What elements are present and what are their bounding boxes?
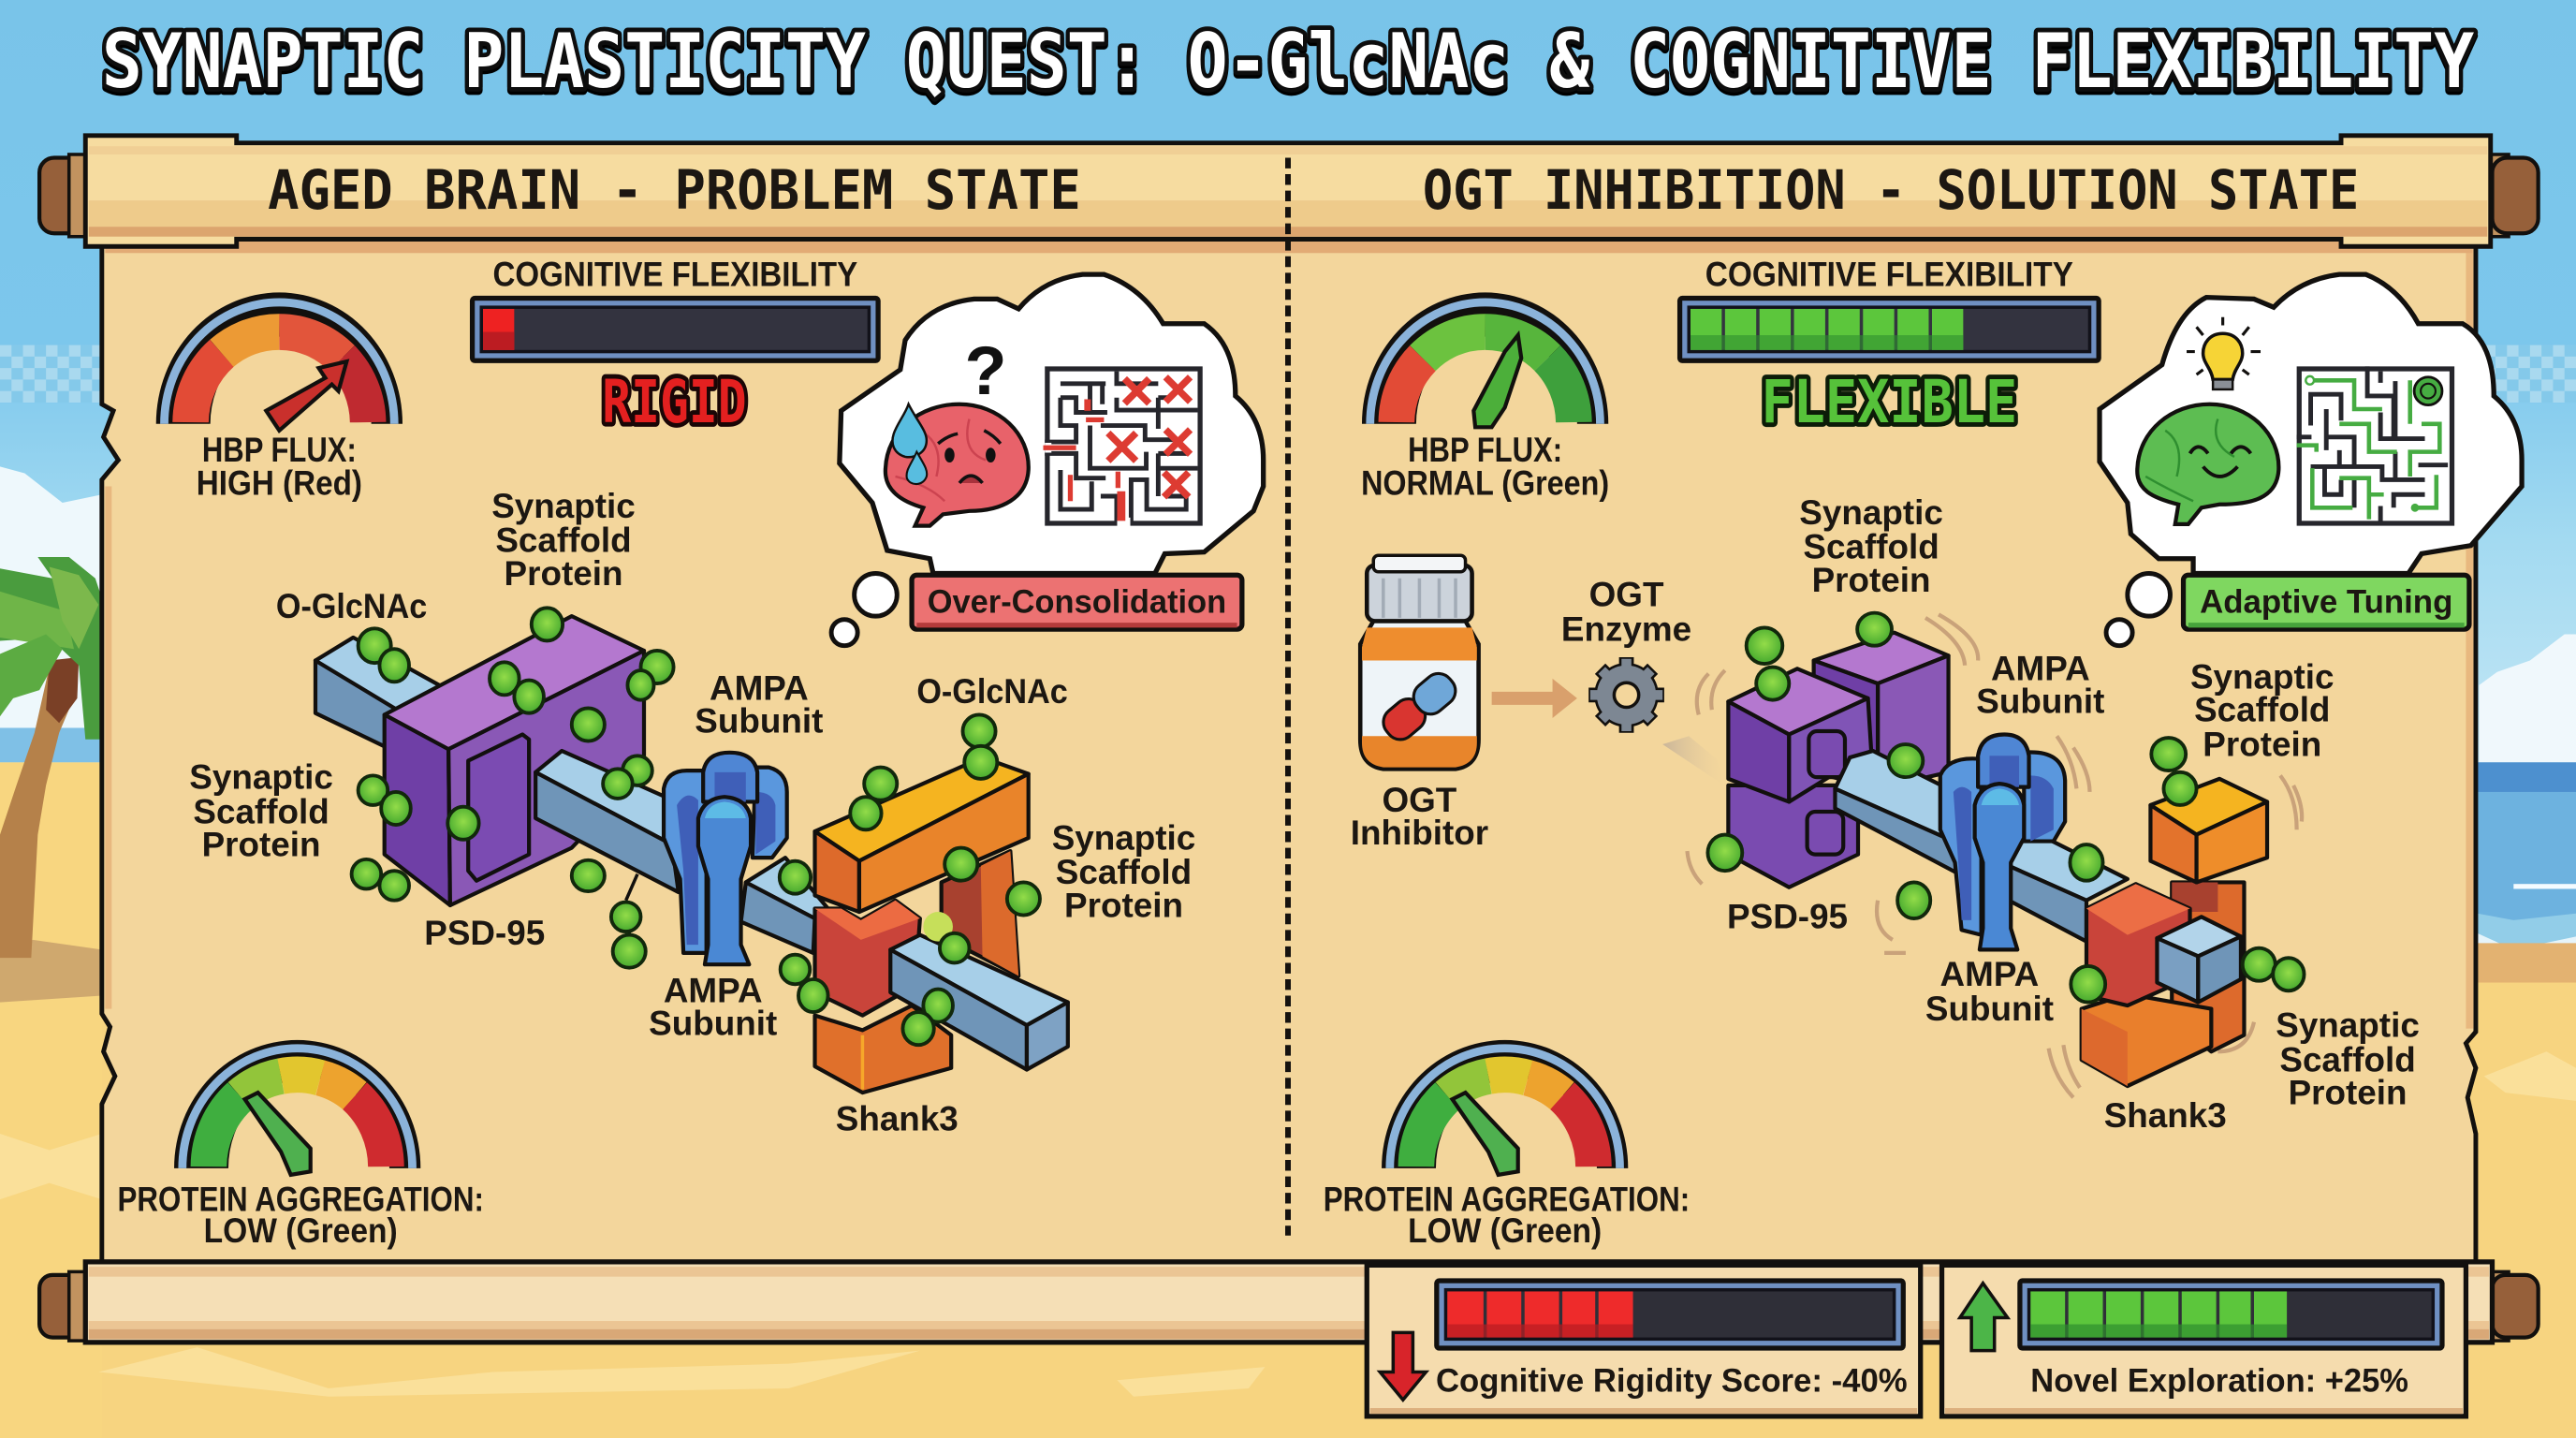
label: cognitive flexibility left: COGNITIVE FLEXIBILITY	[493, 255, 857, 293]
AMPA rail front	[741, 858, 828, 953]
top scroll roller	[39, 136, 2539, 246]
label: O-GlcNAc left: O-GlcNAc	[276, 587, 427, 625]
label: synaptic scaffold top right: Scaffold	[1803, 528, 1939, 566]
AMPA rail end	[890, 935, 1068, 1070]
panel: parchment scroll body	[102, 242, 2476, 1262]
label: AMPA subunit lower left: Subunit	[649, 1005, 777, 1043]
label: HBP flux high: HIGH (Red)	[197, 463, 362, 502]
label: synaptic scaffold lower right: Scaffold	[2279, 1040, 2416, 1078]
label: synaptic scaffold top left	[491, 487, 636, 593]
label: synaptic scaffold far right	[2190, 657, 2334, 763]
icon: question mark: ?	[965, 331, 1007, 409]
label: OGT inhibitor: Inhibitor	[1351, 814, 1488, 852]
thought cloud: adaptive brain	[2100, 274, 2522, 646]
Shank3 orange base	[2082, 994, 2211, 1086]
label: OGT inhibitor: OGT	[1382, 781, 1457, 819]
label: OGT enzyme: Enzyme	[1561, 609, 1691, 648]
diagram: rigid synaptic scaffold	[315, 608, 1068, 1093]
label: AMPA subunit lower left: AMPA	[664, 972, 763, 1010]
palm tree	[0, 557, 102, 958]
icon: OGT enzyme gear	[1588, 657, 1664, 733]
gauge: protein aggregation right	[1382, 1040, 1628, 1175]
label: Shank3 left: Shank3	[836, 1099, 959, 1137]
panel: novel exploration	[1942, 1265, 2466, 1416]
label: protein aggregation left	[117, 1180, 484, 1250]
Shank3 back column	[942, 851, 1018, 976]
label: synaptic scaffold lower right: Synaptic	[2276, 1005, 2420, 1044]
bar: exploration	[2017, 1278, 2445, 1351]
label: HBP flux normal: HBP FLUX:	[1408, 431, 1562, 469]
label: protein aggregation left: PROTEIN AGGREGATION:	[117, 1180, 484, 1218]
label: HBP flux normal	[1361, 431, 1609, 502]
label: protein aggregation right	[1324, 1180, 1690, 1250]
label: Shank3 right: Shank3	[2104, 1096, 2227, 1135]
Shank3 red column	[815, 901, 920, 1016]
label: PSD-95 right: PSD-95	[1727, 898, 1848, 936]
text: novel exploration: Novel Exploration: +25%	[2030, 1363, 2408, 1400]
Shank3 back column	[2172, 882, 2244, 1051]
O-GlcNAc dots left	[352, 608, 1040, 1045]
label: synaptic scaffold right of left panel: Synaptic	[1052, 818, 1195, 857]
label: synaptic scaffold mid left: Synaptic	[189, 757, 333, 796]
label: protein aggregation right: LOW (Green)	[1408, 1211, 1602, 1250]
badge: over-consolidation	[912, 575, 1242, 629]
thought cloud: aged brain	[831, 274, 1264, 646]
label: HBP flux high: HBP FLUX:	[202, 431, 357, 469]
text: rigidity score: Cognitive Rigidity Score: -40%	[1436, 1363, 1908, 1400]
label: synaptic scaffold top left: Protein	[505, 554, 622, 593]
label: O-GlcNAc right of left panel: O-GlcNAc	[916, 672, 1068, 711]
arrow: inhibitor to enzyme	[1492, 679, 1577, 718]
label: OGT enzyme: OGT	[1589, 576, 1664, 614]
panel: cognitive rigidity score	[1367, 1265, 1921, 1416]
label: synaptic scaffold mid left: Protein	[202, 825, 321, 863]
O-GlcNAc tether	[626, 874, 637, 936]
AMPA rail middle	[535, 751, 679, 892]
arrow: exploration up	[1960, 1284, 2008, 1351]
icon: solved maze	[2297, 366, 2452, 523]
AMPA rail end cube	[2157, 917, 2241, 1003]
label: synaptic scaffold top right: Synaptic	[1799, 493, 1943, 532]
PSD-95 back block	[1814, 633, 1949, 788]
label: OGT inhibitor	[1351, 781, 1488, 852]
icon: OGT inhibitor bottle	[1360, 555, 1479, 769]
label: synaptic scaffold right of left panel	[1052, 818, 1195, 924]
label: AMPA subunit top left: Subunit	[695, 702, 823, 741]
icon: happy brain	[2137, 404, 2278, 524]
label: AMPA subunit lower right: Subunit	[1925, 990, 2054, 1028]
label: AMPA subunit top right: AMPA	[1991, 650, 2090, 688]
label: AMPA subunit top left	[695, 669, 823, 741]
gauge: protein aggregation left	[174, 1040, 420, 1175]
label: protein aggregation left: LOW (Green)	[204, 1211, 398, 1250]
status: rigid: RIGID	[602, 367, 747, 436]
bar: rigidity	[1434, 1278, 1906, 1351]
badge: adaptive tuning	[2184, 575, 2469, 629]
badge: adaptive tuning: Adaptive Tuning	[2200, 584, 2452, 621]
Shank3 orange base	[815, 1005, 951, 1093]
Shank3 orange beam	[815, 757, 1029, 912]
diagram: flexible synaptic scaffold	[1662, 613, 2305, 1097]
label: AMPA subunit lower right: AMPA	[1940, 955, 2039, 993]
Shank3 red block	[2086, 884, 2190, 1005]
Shank3 top cube	[2150, 779, 2267, 882]
status: flexible: FLEXIBLE	[1761, 367, 2017, 436]
label: AMPA subunit top right: Subunit	[1976, 682, 2104, 721]
center divider	[1286, 157, 1290, 1236]
PSD-95 upper block	[1728, 668, 1871, 801]
label: synaptic scaffold far right: Synaptic	[2190, 657, 2334, 696]
label: PSD-95 left: PSD-95	[424, 914, 545, 952]
icon: tangled maze	[1043, 369, 1200, 527]
label: protein aggregation right: PROTEIN AGGREGATION:	[1324, 1180, 1690, 1218]
motion lines	[1687, 614, 2302, 1097]
label: synaptic scaffold mid left	[189, 757, 333, 863]
label: synaptic scaffold right of left panel: Protein	[1064, 886, 1183, 924]
label: synaptic scaffold top left: Scaffold	[495, 521, 632, 560]
gauge: HBP flux normal	[1362, 292, 1608, 427]
label: synaptic scaffold top left: Synaptic	[491, 487, 636, 525]
bottom scroll roller	[39, 1262, 2539, 1343]
label: AMPA subunit top right	[1976, 650, 2104, 721]
label: HBP flux high	[197, 431, 362, 502]
AMPA rail	[1835, 751, 2128, 942]
O-GlcNAc dots right	[1707, 613, 2305, 1003]
progress bar: flexible	[1677, 296, 2101, 363]
AMPA subunit	[1940, 734, 2065, 949]
arrow: rigidity down	[1380, 1332, 1426, 1400]
label: synaptic scaffold far right: Scaffold	[2194, 690, 2330, 728]
label: cognitive flexibility right: COGNITIVE FLEXIBILITY	[1705, 255, 2073, 293]
PSD-95 lower block	[1728, 785, 1858, 888]
motion streak	[1662, 736, 1725, 788]
label: synaptic scaffold lower right: Protein	[2289, 1073, 2408, 1111]
label: synaptic scaffold top right: Protein	[1812, 561, 1931, 599]
PSD-95 purple block	[385, 616, 644, 905]
label: AMPA subunit lower right	[1925, 955, 2054, 1028]
progress bar: rigid	[470, 296, 881, 363]
label: synaptic scaffold mid left: Scaffold	[193, 792, 329, 830]
AMPA subunit	[664, 753, 787, 964]
label: synaptic scaffold far right: Protein	[2203, 725, 2321, 763]
label: AMPA subunit lower left	[649, 972, 777, 1043]
badge: over-consolidation: Over-Consolidation	[928, 584, 1226, 621]
label: synaptic scaffold lower right	[2276, 1005, 2420, 1111]
label: HBP flux normal: NORMAL (Green)	[1361, 463, 1609, 502]
heading: problem state: AGED BRAIN - PROBLEM STATE	[268, 158, 1081, 222]
label: synaptic scaffold right of left panel: Scaffold	[1056, 853, 1192, 891]
heading: solution state: OGT INHIBITION - SOLUTION STATE	[1423, 158, 2359, 222]
label: OGT enzyme	[1561, 576, 1691, 648]
gauge: HBP flux high	[156, 292, 402, 431]
icon: light bulb	[2187, 317, 2261, 389]
label: AMPA subunit top left: AMPA	[710, 669, 809, 708]
icon: sad brain	[886, 404, 1029, 526]
AMPA rail stub	[315, 638, 460, 759]
label: synaptic scaffold top right	[1799, 493, 1943, 599]
